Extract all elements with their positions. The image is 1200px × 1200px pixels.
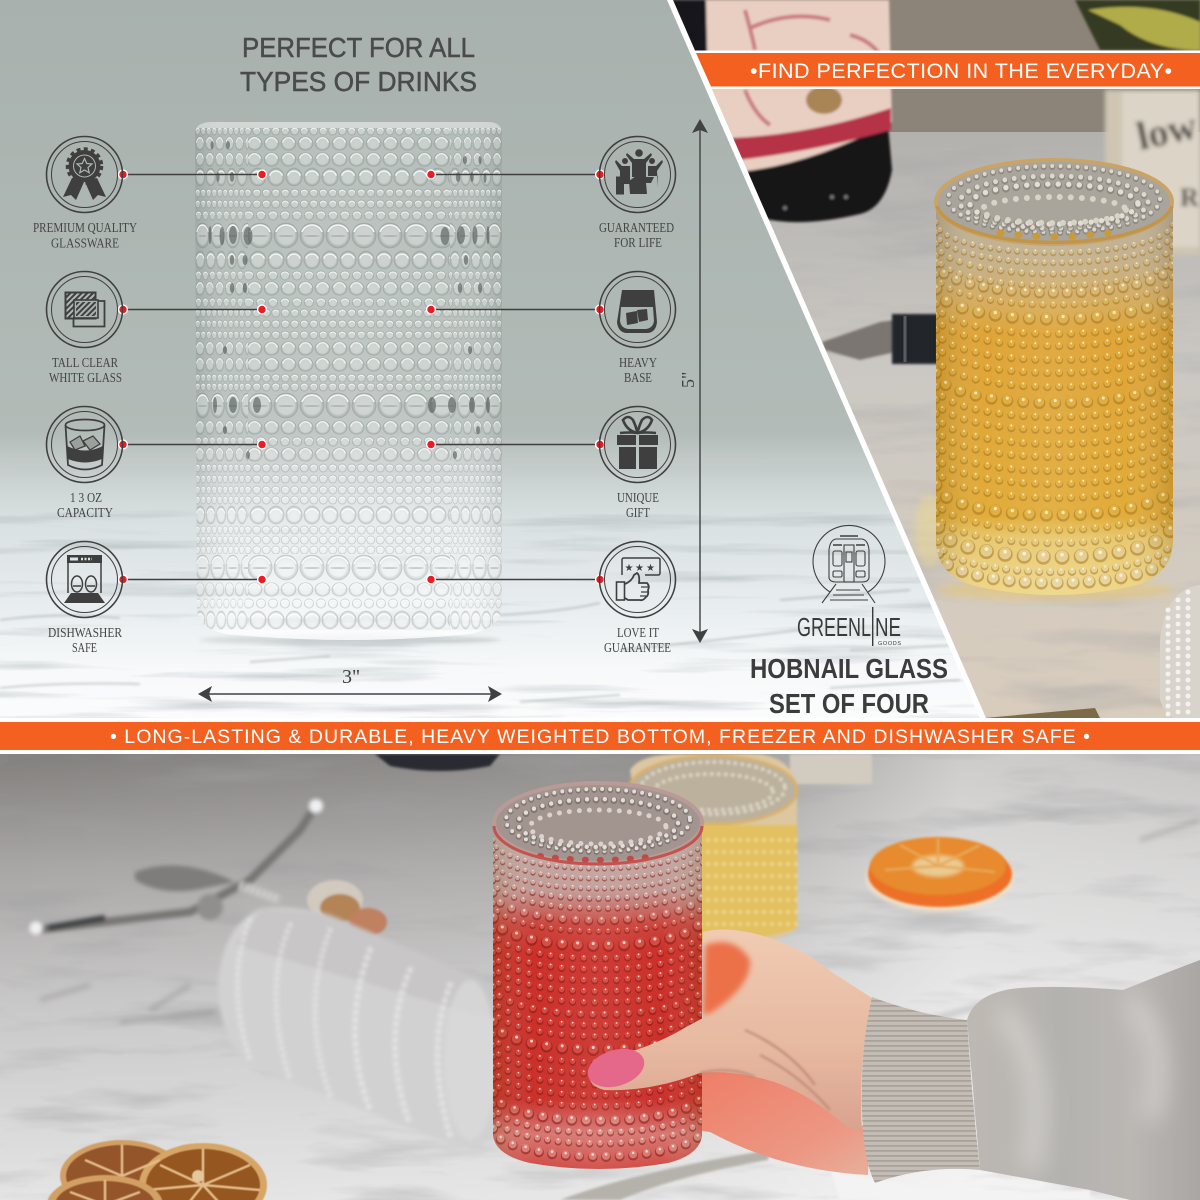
- logo: Greenline Goods: [797, 525, 901, 647]
- wine bottle: [668, 0, 892, 222]
- top banner: [693, 50, 1200, 89]
- product title: hobnail glass set of four: HOBNAIL GLASS: [750, 653, 948, 684]
- metal handle: [985, 708, 1100, 718]
- icon: 13 oz tumbler: [46, 406, 122, 482]
- label: 13 oz capacity: CAPACITY: [57, 506, 113, 521]
- label: dishwasher safe: DISHWASHER: [48, 626, 123, 641]
- label: unique gift: [617, 493, 658, 517]
- partial glass at right edge: [1160, 585, 1200, 718]
- icon: love it thumbs up review: ★: [635, 563, 644, 574]
- arrow: 5 inch height: [692, 119, 708, 643]
- callout lines: [123, 174, 600, 580]
- red drink glass: [490, 783, 705, 1170]
- icon: dishwasher: [46, 542, 122, 618]
- wine cork: [307, 880, 387, 936]
- label: love it guarantee: LOVE IT: [617, 626, 659, 641]
- plant leaves: [1075, 0, 1200, 50]
- label: dishwasher safe: SAFE: [72, 641, 97, 656]
- sweater highlights: [1000, 1000, 1157, 1170]
- dimension label: 5 inches: 5": [678, 372, 698, 388]
- heading: perfect for all types of drinks: [240, 38, 476, 92]
- label: tall clear white glass: [49, 358, 122, 382]
- label: 13 oz capacity: 1 3 OZ: [70, 491, 102, 506]
- label: heavy base: HEAVY: [619, 356, 657, 371]
- icon: love it thumbs up review: ★: [624, 563, 634, 574]
- hand crease shading: [700, 1030, 830, 1110]
- ribbed cuff: [862, 997, 980, 1183]
- thumbnail pink polish: [583, 1042, 649, 1094]
- sweater sleeve: [967, 960, 1200, 1200]
- background card and yellow glass: [629, 754, 872, 942]
- logo wordmark: GREENL: [797, 612, 871, 642]
- logo icon: train in circle: [813, 525, 885, 603]
- background sign: low: [1133, 102, 1200, 159]
- heading: perfect for all types of drinks: TYPES OF DRINKS: [240, 66, 477, 97]
- corkscrew: [30, 799, 323, 934]
- icon: heavy base glass: [600, 272, 676, 348]
- icon: love it thumbs up review: [600, 542, 676, 618]
- background sign: R: [1180, 183, 1199, 212]
- top banner: •FIND PERFECTION IN THE EVERYDAY•: [750, 59, 1172, 83]
- label: premium quality glassware: [33, 223, 137, 248]
- dark reflections in side beads: [208, 141, 490, 459]
- label: premium quality glassware: PREMIUM QUALITY: [33, 221, 137, 236]
- clear glass lying down: [218, 907, 496, 1145]
- label: love it guarantee: [604, 628, 670, 652]
- rim and inner beads: [936, 160, 1172, 244]
- middle banner: • LONG-LASTING & DURABLE, HEAVY WEIGHTED BOTTOM, FREEZER AND DISHWASHER SAFE •: [110, 726, 1090, 748]
- arrow: 3 inch width: [198, 686, 502, 702]
- yellow drink glass: [936, 160, 1173, 600]
- label: dishwasher safe: [48, 628, 122, 652]
- label: unique gift: GIFT: [626, 506, 650, 521]
- label: guaranteed for life: [600, 223, 674, 247]
- hand back and thumb: [589, 930, 872, 1132]
- panel: hand holding red drink on marble: [0, 754, 1200, 1200]
- icon: unique gift: [600, 406, 676, 482]
- icon: tall clear glass panes: [46, 272, 122, 348]
- dimension label: 3 inches: 3": [342, 666, 360, 688]
- marble texture: [0, 754, 1200, 1200]
- fingers behind glass: [695, 1070, 870, 1175]
- red glow in hand: [703, 942, 750, 1015]
- heading: perfect for all types of drinks: PERFECT FOR ALL: [242, 32, 475, 63]
- icon: guaranteed for life crowd and thumb: [600, 136, 676, 212]
- product title: hobnail glass set of four: SET OF FOUR: [769, 688, 929, 719]
- marble glow under glass: [937, 580, 1173, 600]
- label: heavy base: [619, 358, 657, 382]
- label: guaranteed for life: FOR LIFE: [614, 236, 662, 251]
- label: tall clear white glass: TALL CLEAR: [52, 356, 119, 371]
- label: guaranteed for life: GUARANTEED: [599, 221, 674, 236]
- middle banner: [0, 718, 1200, 754]
- label: unique gift: UNIQUE: [617, 491, 659, 506]
- clear hobnail glass: [195, 122, 502, 646]
- diagonal white divider: [667, 0, 986, 718]
- label: premium quality glassware: GLASSWARE: [51, 236, 119, 252]
- callout dots: [119, 170, 604, 584]
- icon: premium quality ribbon: [46, 136, 122, 212]
- dried orange slice on table: [866, 837, 1014, 912]
- bottle base in background: [375, 754, 500, 771]
- label: 13 oz capacity: [58, 493, 113, 517]
- label: love it guarantee: GUARANTEE: [604, 641, 671, 656]
- background sign: [1105, 90, 1200, 255]
- product title: hobnail glass set of four: [750, 653, 948, 719]
- panel: clear glass feature panel: [0, 0, 990, 720]
- logo wordmark: GOODS: [878, 641, 901, 647]
- icon: love it thumbs up review: ★: [646, 563, 655, 574]
- bottle opener: [822, 314, 938, 364]
- label: tall clear white glass: WHITE GLASS: [49, 371, 122, 386]
- marble streaks left: [0, 510, 980, 720]
- dried orange slices stack: [47, 1140, 267, 1200]
- metal tool and white glass foot: [560, 1150, 1090, 1200]
- panel: photo of yellow drink on marble counter: [660, 0, 1200, 722]
- label: heavy base: BASE: [624, 371, 652, 386]
- logo wordmark: NE: [875, 612, 901, 642]
